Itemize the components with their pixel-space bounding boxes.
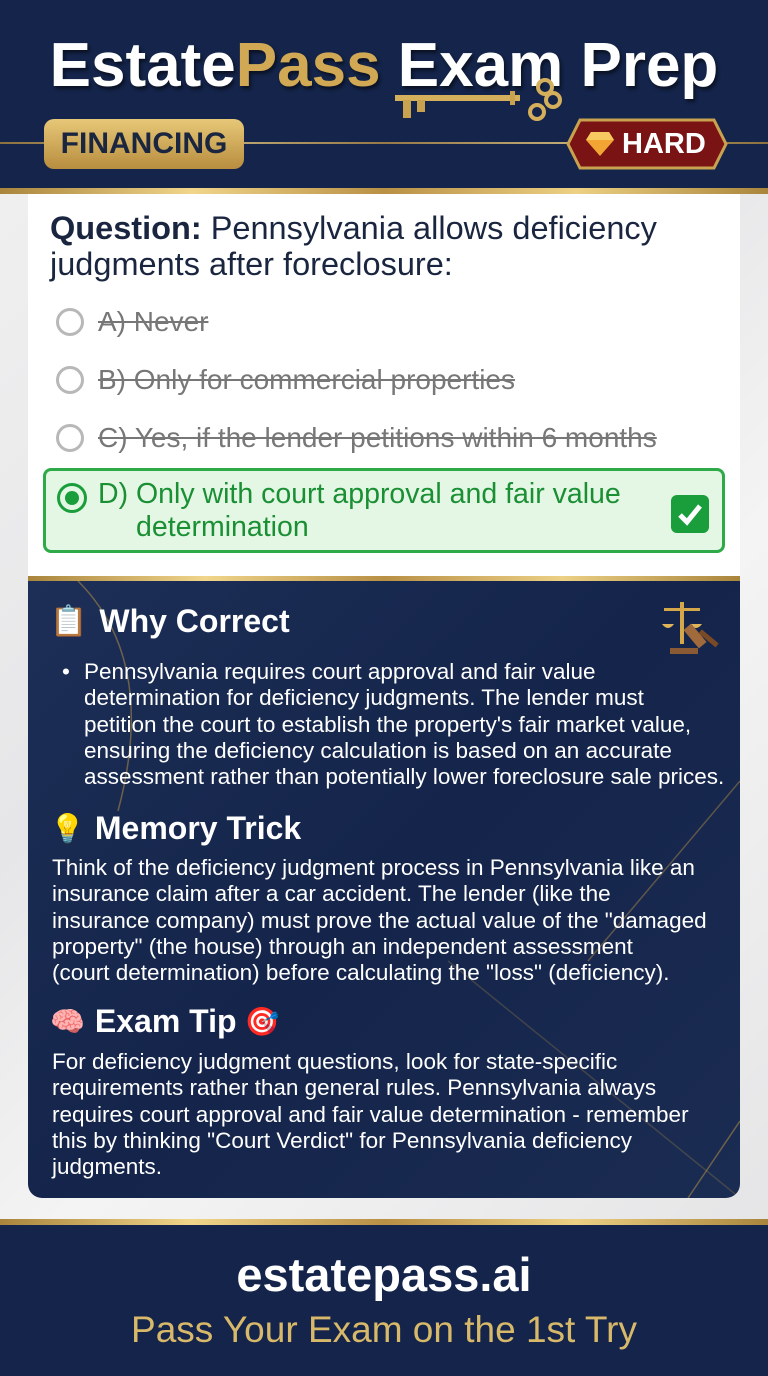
footer <box>0 1225 768 1376</box>
text: memory trick: (court determination) before calculating the "loss" (deficiency). <box>52 960 670 985</box>
option D correct <box>43 468 725 553</box>
text: exam tip: this by thinking "Court Verdict" for Pennsylvania deficiency <box>52 1128 632 1153</box>
option C: C) Yes, if the lender petitions within 6 months <box>98 422 657 453</box>
panel: question card <box>28 194 740 576</box>
heading: why correct: Why Correct <box>99 603 290 639</box>
icon: gem <box>586 132 614 156</box>
text: why correct: determination for deficiency judgments. The lender must <box>84 685 644 710</box>
footer tagline: Pass Your Exam on the 1st Try <box>131 1309 637 1350</box>
text: exam tip: For deficiency judgment questions, look for state-specific <box>52 1049 617 1074</box>
text: exam tip: judgments. <box>52 1154 162 1179</box>
footer url: estatepass.ai <box>236 1248 532 1301</box>
text: memory trick: insurance claim after a car accident. The lender (like the <box>52 881 611 906</box>
text: why correct: ensuring the deficiency calculation is based on an accurate <box>84 738 672 763</box>
icon: scales and gavel <box>662 602 719 654</box>
text: exam tip <box>51 1049 689 1179</box>
badge: financing: FINANCING <box>61 127 227 160</box>
text: why correct: Pennsylvania requires court approval and fair value <box>84 659 596 684</box>
heading: why correct: 📋 <box>50 605 87 638</box>
badge: hard: HARD <box>622 128 706 160</box>
heading: exam tip: Exam Tip <box>95 1003 237 1039</box>
option B: B) Only for commercial properties <box>98 364 515 395</box>
heading: exam tip: 🎯 <box>245 1006 279 1037</box>
header <box>0 0 768 188</box>
heading: memory trick: 💡 <box>50 813 85 844</box>
question text <box>49 210 657 282</box>
text: memory trick <box>52 855 707 985</box>
badge: financing <box>44 119 244 169</box>
text: exam tip: requirements rather than general rules. Pennsylvania always <box>52 1075 656 1100</box>
panel: explanation <box>28 581 740 1198</box>
text: why correct <box>62 659 724 789</box>
heading: exam tip: 🧠 <box>50 1006 85 1037</box>
heading: memory trick: Memory Trick <box>95 810 301 846</box>
option D correct: D) Only with court approval and fair value <box>98 478 621 510</box>
option A: A) Never <box>98 306 208 337</box>
icon: key <box>395 78 562 121</box>
text: memory trick: insurance company) must prove the actual value of the "damaged <box>52 908 707 933</box>
badge: hard <box>566 118 728 170</box>
text: why correct: • <box>62 659 70 684</box>
question text: Question: Pennsylvania allows deficiency <box>50 210 657 246</box>
title: EstatePass Exam Prep <box>50 31 718 100</box>
heading: exam tip <box>50 1003 279 1039</box>
text: memory trick: Think of the deficiency judgment process in Pennsylvania like an <box>52 855 695 880</box>
icon: check <box>671 495 709 533</box>
text: why correct: petition the court to establish the property's fair market value, <box>84 712 691 737</box>
option D correct: determination <box>136 511 309 543</box>
question text: judgments after foreclosure: <box>50 246 453 282</box>
text: why correct: assessment rather than potentially lower foreclosure sale prices. <box>84 764 724 789</box>
text: memory trick: property" (the house) through an independent assessment <box>52 934 633 959</box>
text: exam tip: requires court approval and fair value determination - remember <box>52 1102 689 1127</box>
